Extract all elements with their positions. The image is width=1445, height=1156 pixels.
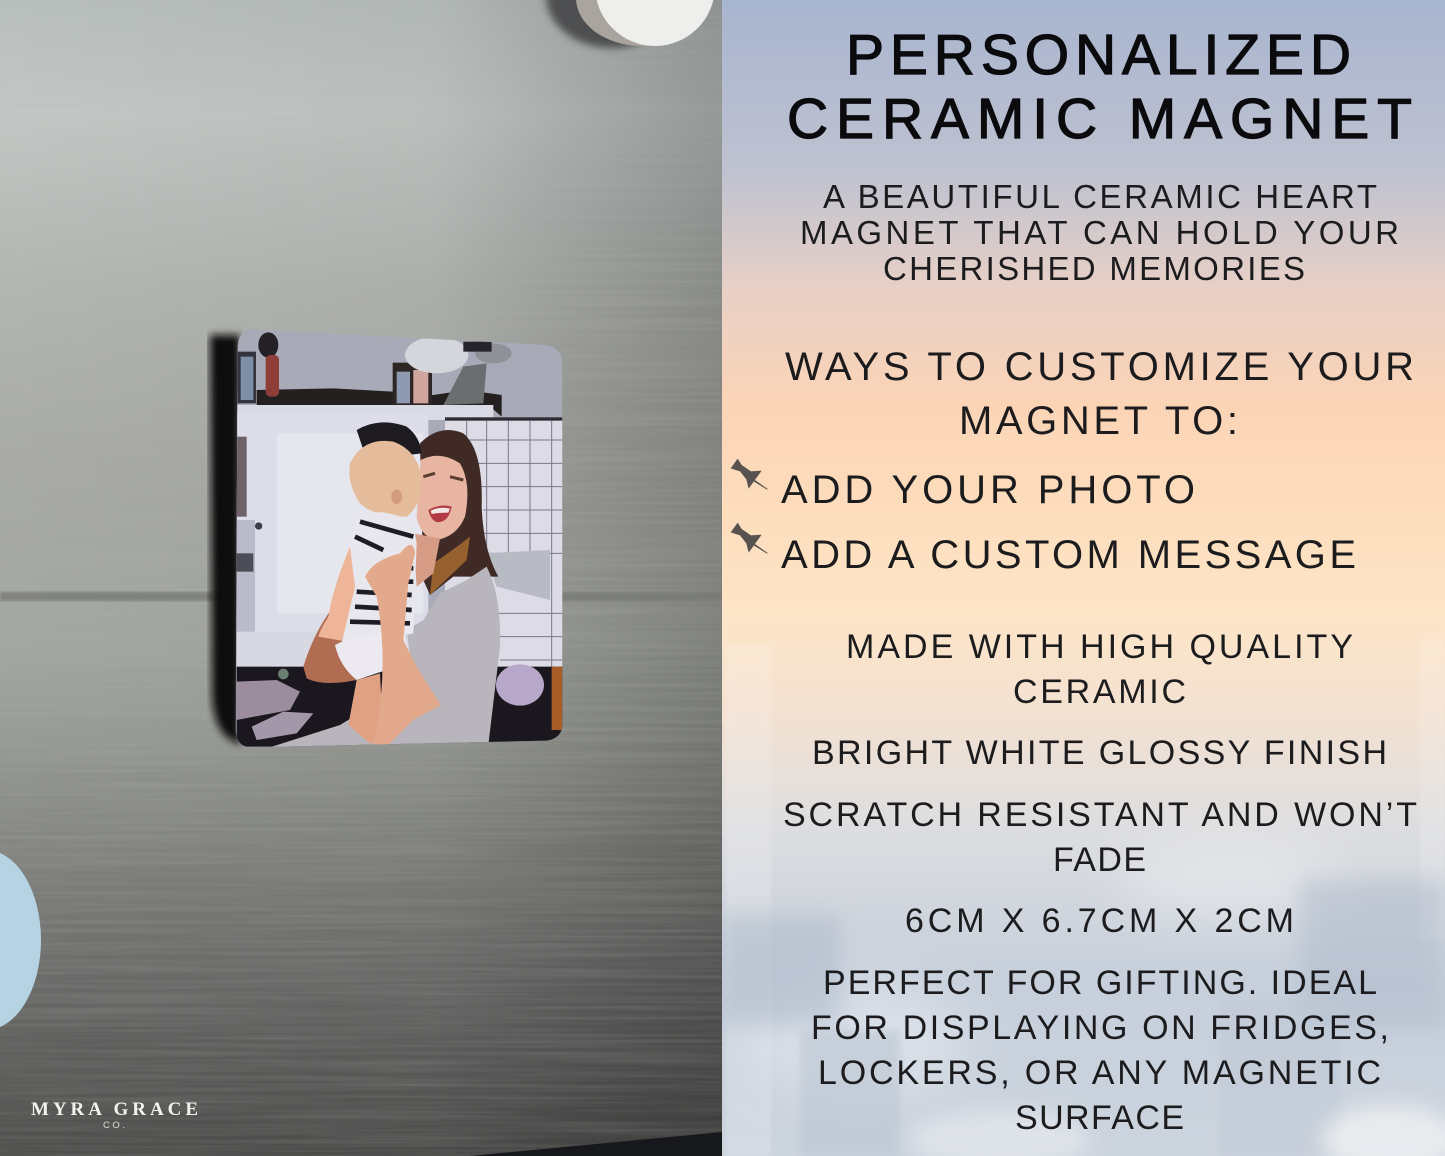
panel: brushed metal fridge photo — [0, 0, 722, 1156]
feature: glossy finish: BRIGHT WHITE GLOSSY FINISH — [812, 734, 1387, 772]
ceramic magnet with photo — [210, 327, 567, 753]
subtitle — [800, 178, 1399, 287]
plaid sofa — [445, 417, 563, 667]
baby — [318, 441, 422, 743]
list item: add your photo: ADD YOUR PHOTO — [781, 468, 1195, 512]
heading: ways to customize — [785, 345, 1414, 443]
title: PERSONALIZED — [846, 23, 1351, 87]
woman hair and face — [357, 422, 498, 595]
panel: sunset sky background — [720, 0, 1445, 1156]
pale blue round magnet at left — [0, 850, 41, 1030]
white cabinet — [237, 405, 493, 668]
shelf with ornaments — [238, 332, 512, 417]
list item: add a custom message: ADD A CUSTOM MESSAGE — [781, 533, 1356, 577]
feature: perfect for gifting — [811, 964, 1389, 1137]
icon: push pin — [731, 459, 768, 490]
heading: ways to customize: MAGNET TO: — [959, 399, 1238, 443]
feature: high quality ceramic — [846, 628, 1353, 711]
woman's far arm — [303, 607, 357, 683]
title — [787, 23, 1412, 151]
photo background — [233, 327, 567, 753]
feature: high quality ceramic: CERAMIC — [1013, 673, 1186, 711]
icon: push pin — [731, 523, 768, 554]
feature: scratch resistant — [783, 796, 1417, 879]
woman's forearm and hand — [365, 545, 441, 747]
feature: perfect for gifting: SURFACE — [1015, 1099, 1184, 1137]
subtitle: MAGNET THAT CAN HOLD YOUR — [800, 214, 1399, 251]
woman dress — [267, 567, 500, 748]
feature: dimensions: 6CM X 6.7CM X 2CM — [905, 902, 1294, 940]
feature: high quality ceramic: MADE WITH HIGH QUALITY — [846, 628, 1353, 666]
heading: ways to customize: WAYS TO CUSTOMIZE YOUR — [785, 345, 1414, 389]
subtitle: A BEAUTIFUL CERAMIC HEART — [823, 178, 1377, 215]
title: CERAMIC MAGNET — [787, 87, 1412, 151]
feature: scratch resistant: SCRATCH RESISTANT AND WON’T — [783, 796, 1417, 834]
logo: Myra Grace Co.: CO. — [103, 1120, 125, 1131]
floor, toys and balloon — [237, 664, 563, 747]
logo: Myra Grace Co. — [31, 1102, 198, 1128]
feature: perfect for gifting: LOCKERS, OR ANY MAGNETIC — [818, 1054, 1381, 1092]
feature: perfect for gifting: FOR DISPLAYING ON FRIDGES, — [811, 1009, 1389, 1047]
logo: Myra Grace Co.: MYRA GRACE — [31, 1099, 198, 1120]
feature: perfect for gifting: PERFECT FOR GIFTING. IDEAL — [823, 964, 1377, 1002]
white round magnet at top — [546, 0, 715, 48]
feature: scratch resistant: FADE — [1053, 841, 1146, 879]
subtitle: CHERISHED MEMORIES — [883, 250, 1305, 287]
